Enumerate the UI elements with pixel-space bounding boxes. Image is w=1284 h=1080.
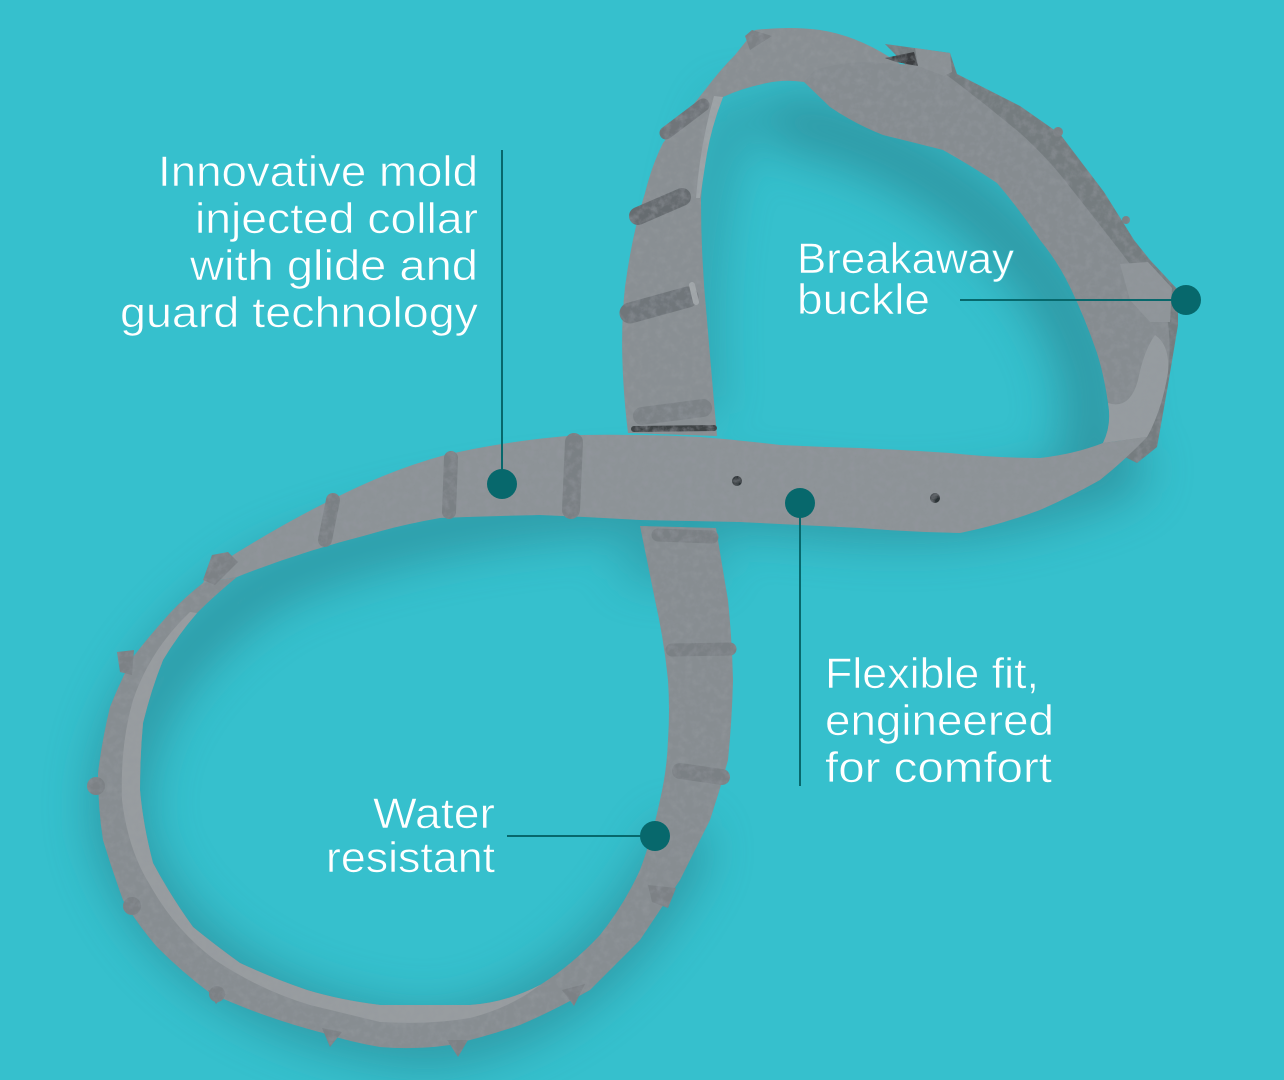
leader line and dot: [487, 150, 517, 499]
front strap of right loop: [804, 62, 1170, 443]
callout text: Flexible fit,: [825, 650, 1039, 698]
callout text: with glide and: [189, 242, 478, 290]
callout text: [797, 235, 1015, 324]
buckle block: [915, 48, 952, 76]
buckle knob: [1120, 262, 1172, 322]
callout text: resistant: [326, 834, 495, 882]
callout text: [825, 650, 1054, 792]
collar shadow: [119, 110, 1120, 1040]
callout text: [120, 148, 479, 337]
callout text: buckle: [797, 276, 930, 324]
ribs on top strap: [630, 105, 714, 429]
callout text: engineered: [825, 697, 1054, 745]
callout text: guard technology: [120, 289, 479, 337]
back strap of right loop: [885, 44, 1178, 463]
lower vertical strap and left loop: [98, 526, 733, 1048]
callout: breakaway buckle: [797, 235, 1201, 324]
callout text: for comfort: [825, 744, 1052, 792]
strap holes: [732, 476, 742, 486]
leader line and dot: [507, 821, 670, 851]
lighter edge of right loop: [1103, 335, 1168, 443]
lighter inner edge of top strap: [696, 96, 723, 198]
ribs on lower strap: [658, 535, 730, 777]
dark gap at buckle: [885, 52, 918, 66]
lighter inner wall of left loop: [122, 612, 540, 1023]
top loop strap: [622, 28, 900, 436]
callout: water resistant: [326, 790, 670, 882]
callout text: Innovative mold: [158, 148, 478, 196]
callout text: [326, 790, 495, 882]
callout text: injected collar: [195, 195, 478, 243]
knobs on collar: [87, 30, 1130, 1057]
callout text: Water: [373, 790, 495, 838]
callout: mold injected collar: [120, 148, 517, 499]
leader line and dot: [960, 285, 1201, 315]
callout text: Breakaway: [797, 235, 1015, 283]
leader line and dot: [785, 488, 815, 786]
callout: flexible fit: [785, 488, 1054, 792]
horizontal strap: [203, 435, 1147, 583]
ribs on horizontal strap: [325, 442, 574, 540]
